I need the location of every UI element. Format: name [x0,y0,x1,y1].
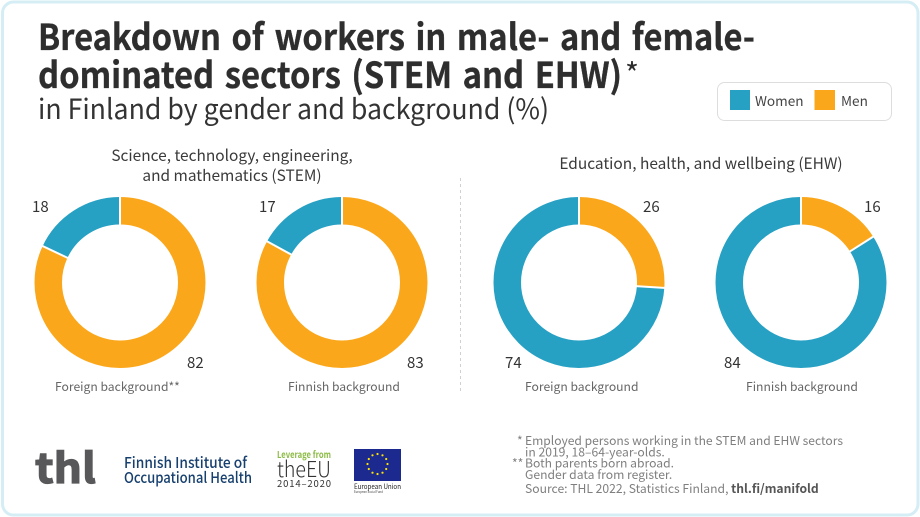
logo: European Union flag: European Social Fund [354,490,383,495]
logo: Leverage from the EU [277,447,331,490]
donut: STEM Finnish background [266,196,414,354]
caption: Finnish background STEM: Finnish background [288,378,400,395]
footnotes: Both parents born abroad. [525,454,674,472]
value: 18: 18 [32,196,49,217]
footnotes: Gender data from register. [525,466,672,483]
logo: Finnish Institute of Occupational Health [124,452,252,488]
donut: EHW Finnish background [729,196,874,354]
value: 17: 17 [259,196,276,217]
logo: Finnish Institute of Occupational Health: Finnish Institute of [124,452,248,473]
logo: Finnish Institute of Occupational Health: Occupational Health [124,467,252,488]
footnotes: Source: THL 2022, Statistics Finland, thl.fi/manifold [525,480,819,497]
footnotes: in 2019, 18–64-year-olds. [525,444,665,460]
caption: foreign background EHW: Foreign background [525,378,638,395]
logo: Leverage from the EU: 2014–2020 [277,476,331,490]
legend [718,82,892,120]
heading: STEM [111,144,353,186]
logo: European Union flag [354,449,401,495]
donut: EHW foreign background [507,196,666,354]
legend: Women [755,90,804,110]
value: 74: 74 [505,352,522,373]
legend: Men [841,90,868,110]
heading: STEM: Science, technology, engineering, [111,144,353,166]
title: dominated sectors (STEM and EHW) [38,47,622,99]
caption: Finnish background EHW: Finnish background [746,378,858,395]
value: 26: 26 [643,196,660,217]
footnotes: ** [512,454,523,472]
footnotes: Employed persons working in the STEM and EHW sectors [525,432,843,449]
title [38,9,755,99]
caption: foreign background STEM: Foreign background** [55,378,180,395]
logo: Leverage from the EU: theEU [277,452,331,484]
footnotes: * [517,432,523,449]
logo: Leverage from the EU: Leverage from [277,447,331,461]
donut: STEM foreign background [41,196,192,354]
footnotes [512,432,843,497]
logo: European Union flag: European Union [354,482,401,492]
title: * [625,50,639,94]
value: 16: 16 [864,196,881,217]
value: 82: 82 [187,352,204,373]
logo: thl: thl [35,435,96,495]
heading: EHW: Education, health, and wellbeing (EHW) [559,152,843,174]
value: 83: 83 [407,352,424,373]
value: 84: 84 [724,352,741,373]
title: Breakdown of workers in male- and female- [38,9,755,61]
subtitle: in Finland by gender and background (%) [38,88,549,128]
heading: STEM: and mathematics (STEM) [142,164,322,186]
